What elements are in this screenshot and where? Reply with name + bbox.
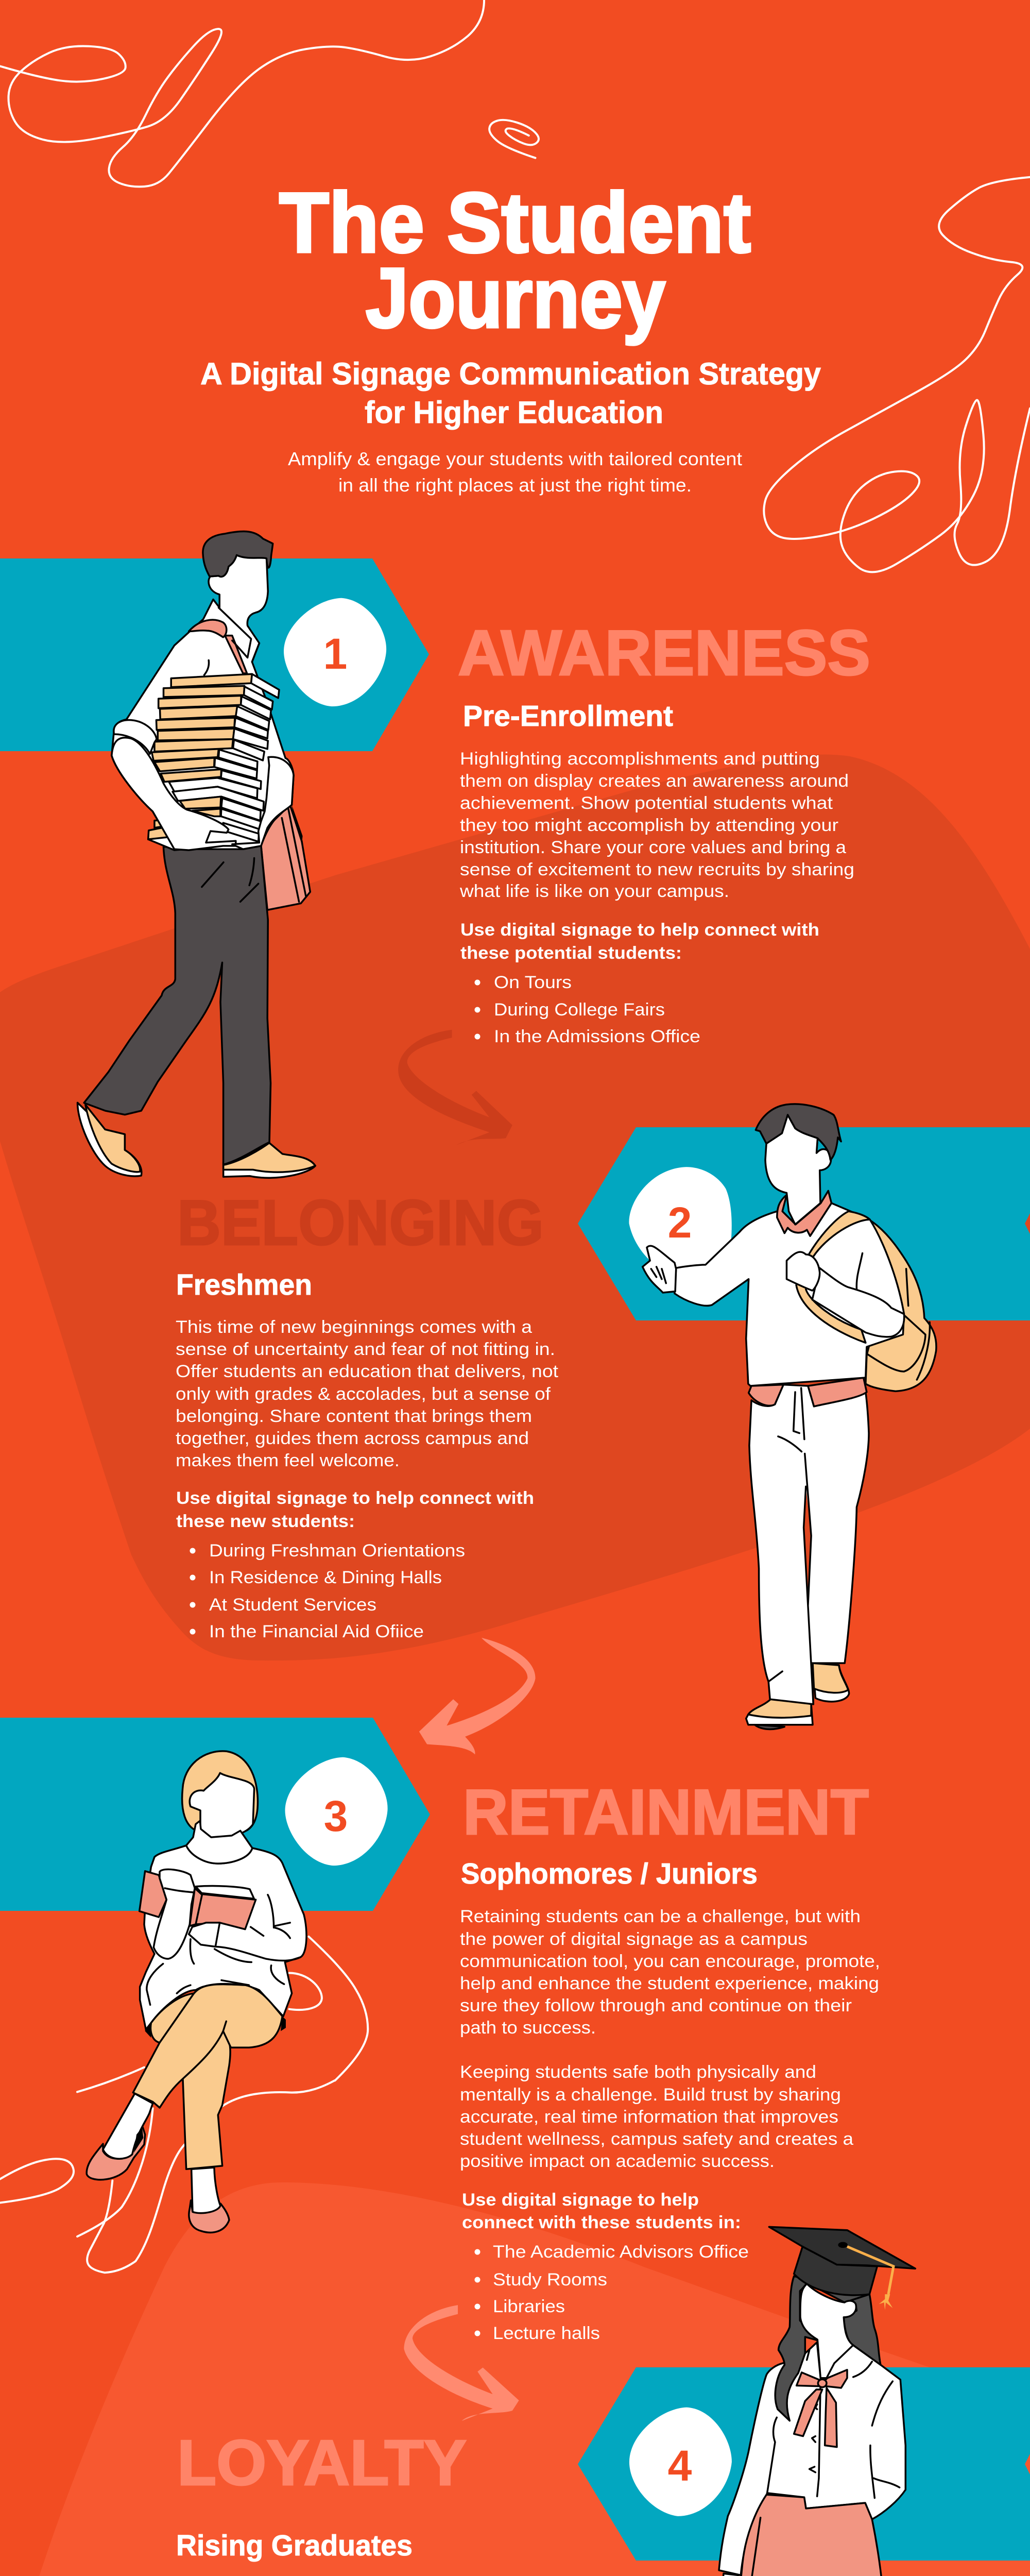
text block: retainment body: sure they follow through and continue on their — [460, 1996, 852, 2015]
list: retainment locations — [475, 2242, 749, 2343]
icon: number 3 badge: 3 — [324, 1792, 348, 1840]
list: awareness locations: In the Admissions Office — [494, 1027, 700, 1046]
text block: belonging body: This time of new beginnings comes with a — [176, 1317, 532, 1337]
text block: retainment call to action: Use digital signage to help — [462, 2190, 699, 2210]
text block: belonging call to action — [176, 1488, 534, 1531]
heading: awareness: AWARENESS — [458, 618, 870, 689]
icon: number 4 badge: 4 — [668, 2442, 692, 2490]
panel: awareness band — [0, 558, 429, 751]
text block: retainment body: accurate, real time information that improves — [460, 2107, 838, 2127]
list: belonging locations: During Freshman Orientations — [209, 1541, 465, 1561]
list: belonging locations — [190, 1541, 465, 1641]
text block: retainment body: the power of digital signage as a campus — [460, 1929, 808, 1949]
text block: belonging body: only with grades & accolades, but a sense of — [176, 1384, 551, 1404]
text block: awareness body: they too might accomplish by attending your — [460, 816, 838, 835]
icon: number 1 badge — [284, 598, 386, 706]
figure: graduate with cap — [714, 2227, 947, 2576]
title: Journey — [366, 250, 665, 345]
arrow: retainment to loyalty — [404, 2305, 519, 2421]
figure: seated student reading — [87, 1751, 306, 2232]
text block: awareness call to action: these potential students: — [460, 943, 682, 963]
text block: awareness body: achievement. Show potential students what — [460, 793, 833, 813]
figure: student carrying books — [78, 531, 315, 1178]
arrow: belonging to retainment — [419, 1638, 536, 1754]
tagline — [288, 448, 742, 496]
text block: retainment body: path to success. — [460, 2018, 596, 2038]
subheading: sophomores / juniors: Sophomores / Juniors — [461, 1857, 758, 1890]
panel: retainment text — [460, 1777, 880, 2343]
panel: loyalty text — [176, 2428, 561, 2576]
list: retainment locations: Study Rooms — [493, 2270, 607, 2290]
text block: belonging call to action: Use digital signage to help connect with — [176, 1488, 534, 1508]
scribble: around seated student — [0, 1937, 368, 2273]
list: belonging locations: In Residence & Dining Halls — [209, 1568, 442, 1587]
text block: belonging body: belonging. Share content that brings them — [176, 1406, 532, 1426]
icon: number 4 badge — [629, 2408, 732, 2516]
icon: number 2 badge: 2 — [668, 1198, 692, 1247]
title: The Student — [279, 175, 751, 270]
text block: retainment call to action: connect with these students in: — [462, 2213, 741, 2232]
text block: retainment body: Retaining students can be a challenge, but with — [460, 1907, 861, 1926]
text block: retainment body — [460, 1907, 880, 2171]
icon: number 1 badge: 1 — [323, 630, 347, 678]
text block: awareness call to action — [460, 920, 819, 963]
subheading: pre-enrollment: Pre-Enrollment — [463, 700, 673, 733]
list: retainment locations: The Academic Advisors Office — [493, 2242, 749, 2262]
panel: belonging text — [176, 1188, 559, 1641]
text block: awareness body: sense of excitement to new recruits by sharing — [460, 860, 854, 879]
text block: awareness body: what life is like on your campus. — [459, 882, 729, 901]
icon: number 2 badge — [629, 1167, 732, 1277]
text block: retainment body: positive impact on academic success. — [460, 2151, 775, 2171]
text block: awareness body: institution. Share your core values and bring a — [460, 838, 846, 857]
scribble: top right — [764, 177, 1030, 572]
text block: belonging body: together, guides them across campus and — [176, 1429, 529, 1448]
subtitle: for Higher Education — [365, 395, 663, 430]
list: retainment locations: Libraries — [493, 2297, 565, 2316]
text block: retainment body: help and enhance the student experience, making — [460, 1974, 879, 1993]
text block: retainment call to action — [462, 2190, 741, 2232]
panel: loyalty band — [578, 2367, 1030, 2561]
heading: belonging: BELONGING — [177, 1188, 544, 1259]
text block: retainment body: student wellness, campus safety and creates a — [460, 2129, 853, 2149]
background shape: light blob — [0, 2182, 1030, 2576]
title — [279, 175, 751, 345]
list: belonging locations: At Student Services — [209, 1595, 376, 1615]
text block: retainment body: communication tool, you can encourage, promote, — [460, 1952, 880, 1971]
subheading: freshmen: Freshmen — [176, 1268, 312, 1301]
tagline: Amplify & engage your students with tailored content — [288, 448, 742, 469]
text block: awareness body: them on display creates an awareness around — [460, 771, 849, 791]
list: awareness locations — [475, 973, 700, 1046]
text block: belonging body — [176, 1317, 559, 1470]
subtitle — [200, 357, 821, 430]
list: belonging locations: In the Financial Aid Ofiice — [209, 1622, 424, 1641]
list: retainment locations: Lecture halls — [493, 2324, 600, 2343]
scribble: spiral — [489, 120, 539, 158]
panel: awareness text — [458, 618, 870, 1046]
icon: number 3 badge — [285, 1757, 388, 1866]
subtitle: A Digital Signage Communication Strategy — [200, 357, 821, 391]
text block: retainment body: Keeping students safe both physically and — [460, 2062, 816, 2082]
list: awareness locations: During College Fairs — [494, 1000, 665, 1020]
background shape: dark blob — [0, 755, 1030, 1660]
figure: freshman with backpack — [643, 1104, 936, 1729]
panel: belonging band — [578, 1127, 1030, 1320]
tagline: in all the right places at just the right time. — [338, 474, 692, 496]
panel: retainment band — [0, 1718, 430, 1911]
text block: awareness body: Highlighting accomplishments and putting — [460, 749, 820, 769]
text block: belonging body: Offer students an education that delivers, not — [176, 1362, 559, 1381]
text block: awareness call to action: Use digital signage to help connect with — [460, 920, 819, 940]
subheading: rising graduates: Rising Graduates — [176, 2529, 413, 2562]
text block: belonging body: sense of uncertainty and fear of not fitting in. — [176, 1340, 555, 1359]
text block: belonging call to action: these new students: — [176, 1512, 355, 1531]
arrow: awareness to belonging — [398, 1030, 512, 1145]
list: awareness locations: On Tours — [494, 973, 572, 992]
text block: retainment body: mentally is a challenge. Build trust by sharing — [460, 2085, 841, 2105]
text block: belonging body: makes them feel welcome. — [176, 1451, 400, 1470]
text block: awareness body — [459, 749, 854, 901]
heading: loyalty: LOYALTY — [177, 2428, 467, 2499]
scribble: top left — [0, 0, 484, 187]
heading: retainment: RETAINMENT — [463, 1777, 869, 1848]
